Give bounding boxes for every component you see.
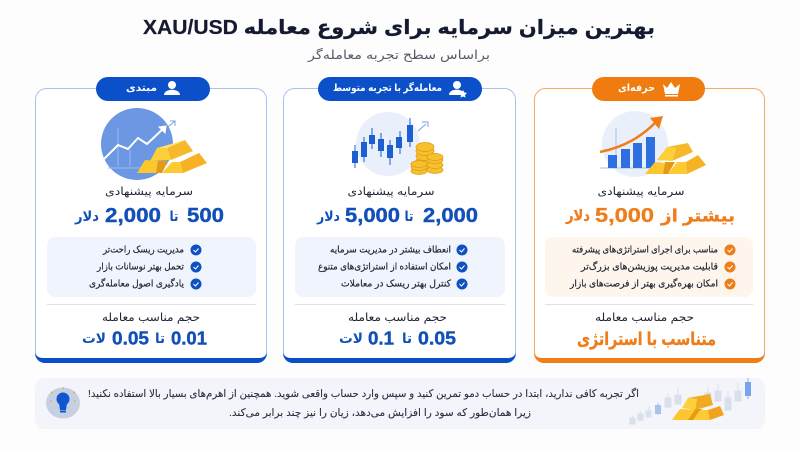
value: capital range: [74, 205, 224, 227]
list: benefits: [545, 237, 753, 297]
badge: intermediate: [318, 77, 482, 101]
illustration: bars and gold: [600, 111, 706, 177]
value: lot range: تا: [402, 330, 412, 346]
value: capital range: 2,000: [423, 205, 478, 227]
list: benefits: امکان بهره‌گیری بهتر از فرصت‌های بازار: [569, 278, 718, 290]
value: capital range: 500: [187, 205, 224, 227]
list: benefits: قابلیت مدیریت پوزیشن‌های بزرگ‌تر: [580, 260, 718, 272]
heading: trade size: حجم مناسب معامله: [102, 312, 200, 324]
heading: suggested capital: سرمایه پیشنهادی: [348, 186, 434, 198]
badge: professional: حرفه‌ای: [618, 83, 655, 94]
value: capital range: 5,000: [345, 205, 400, 227]
value: capital range: بیشتر از: [660, 206, 735, 226]
illustration: candlesticks and coins: [352, 112, 443, 176]
illustration: growth chart and gold bars: [101, 108, 207, 180]
value: strategy dependent: متناسب با استراتژی: [577, 329, 716, 350]
value: capital range: دلار: [316, 208, 340, 224]
heading: suggested capital: سرمایه پیشنهادی: [598, 186, 684, 198]
value: lot range: [82, 328, 207, 348]
value: lot range: 0.01: [171, 328, 207, 348]
value: capital range: 5,000: [595, 205, 654, 227]
callout: beginner advice: [35, 378, 765, 429]
list: benefits: امکان استفاده از استراتژی‌های متنوع: [318, 262, 451, 272]
list: benefits: [47, 237, 256, 297]
heading: trade size: حجم مناسب معامله: [595, 312, 694, 324]
card frame: [534, 88, 765, 363]
card frame: [283, 88, 516, 363]
value: capital range: [316, 205, 478, 227]
value: lot range: لات: [82, 330, 106, 346]
value: lot range: تا: [155, 330, 165, 346]
value: capital range: تا: [170, 208, 178, 224]
card frame: [35, 88, 267, 363]
value: capital range: [565, 205, 735, 227]
illustration: candles and gold: [630, 378, 751, 425]
list: benefits: مناسب برای اجرای استراتژی‌های پیشرفته: [572, 244, 718, 256]
advice text: اگر تجربه کافی ندارید، ابتدا در حساب دمو تمرین کنید و سپس وارد حساب واقعی شوید. همچنین از اهرم‌های بسیار بالا استفاده نکنید!: [88, 387, 639, 400]
value: capital range: 2,000: [105, 205, 161, 227]
value: lot range: 0.1: [368, 328, 394, 348]
icon: light bulb: [46, 387, 80, 418]
heading: trade size: حجم مناسب معامله: [348, 312, 447, 324]
list: benefits: کنترل بهتر ریسک در معاملات: [341, 278, 451, 290]
badge: beginner: [96, 77, 210, 101]
list: benefits: تحمل بهتر نوسانات بازار: [96, 262, 184, 272]
title: بهترین میزان سرمایه برای شروع معامله XAU/USD: [143, 17, 655, 39]
panel: intermediate: [283, 77, 516, 363]
value: lot range: [339, 328, 456, 348]
list: benefits: [295, 237, 505, 297]
badge: beginner: مبتدی: [126, 83, 157, 94]
value: lot range: 0.05: [112, 328, 149, 348]
badge: intermediate: معامله‌گر با تجربه متوسط: [333, 81, 442, 94]
list: benefits: انعطاف بیشتر در مدیریت سرمایه: [330, 244, 451, 256]
badge: professional: [592, 77, 705, 101]
value: capital range: دلار: [565, 208, 590, 224]
value: lot range: 0.05: [418, 328, 456, 348]
subtitle: براساس سطح تجربه معامله‌گر: [307, 47, 490, 63]
list: benefits: یادگیری اصول معامله‌گری: [89, 278, 184, 290]
advice text: زیرا همان‌طور که سود را افزایش می‌دهد، زیان را نیز چند برابر می‌کند.: [229, 407, 531, 419]
panel: professional: [534, 77, 765, 363]
value: lot range: لات: [339, 330, 363, 346]
advice text: [88, 387, 639, 419]
value: capital range: تا: [404, 208, 414, 224]
list: benefits: مدیریت ریسک راحت‌تر: [102, 244, 184, 256]
heading: suggested capital: سرمایه پیشنهادی: [105, 186, 193, 198]
panel: beginner: [35, 77, 267, 363]
value: capital range: دلار: [74, 208, 99, 224]
